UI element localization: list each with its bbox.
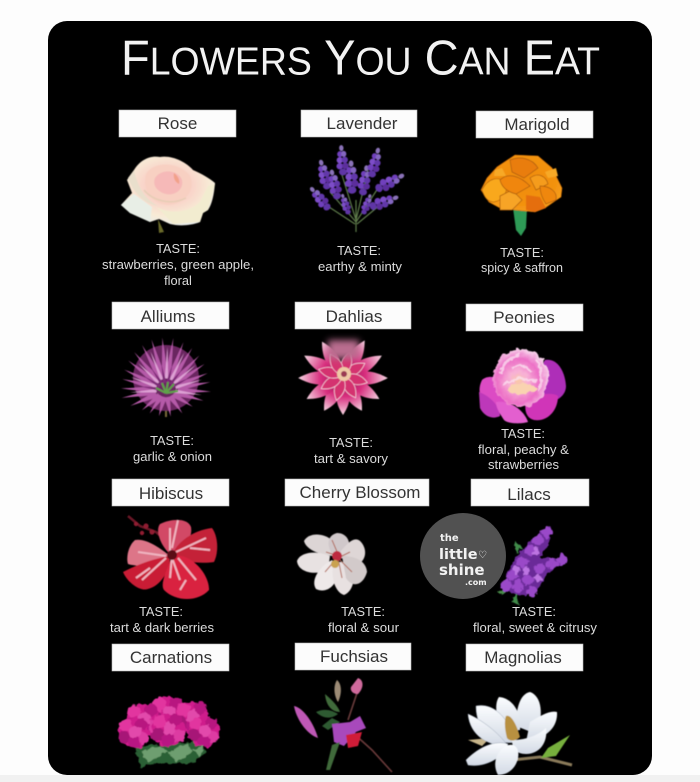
item: Lilacs — [471, 479, 598, 635]
label: Lavender: Lavender — [327, 114, 398, 133]
taste text: Rose — [102, 241, 254, 288]
item: Hibiscus — [110, 479, 229, 635]
icon: carnation flowers — [118, 697, 219, 768]
taste text: Peonies — [478, 426, 569, 472]
item: Peonies — [466, 304, 583, 472]
taste text: Dahlias: tart & savory — [314, 451, 389, 466]
item: Lavender — [301, 110, 417, 274]
item: Carnations — [112, 644, 229, 768]
watermark: the little shine: shine — [439, 561, 485, 579]
label: Lilacs: Lilacs — [507, 485, 551, 504]
label: Alliums: Alliums — [141, 307, 195, 326]
taste text: Lilacs: floral, sweet & citrusy — [473, 620, 598, 635]
watermark: the little shine: ♡ — [478, 550, 487, 561]
taste text: Alliums — [133, 433, 212, 464]
item: Marigold — [476, 111, 593, 275]
taste text: Alliums: garlic & onion — [133, 449, 212, 464]
taste text: Rose: strawberries, green apple, — [102, 257, 254, 272]
icon: marigold flower — [481, 155, 562, 236]
taste text: Rose: TASTE: — [156, 241, 200, 256]
taste text: Peonies: strawberries — [488, 457, 559, 472]
taste text: Cherry Blossom — [328, 604, 400, 635]
watermark: the little shine — [420, 513, 506, 599]
label: Cherry Blossom — [285, 479, 429, 506]
taste text: Peonies: TASTE: — [501, 426, 545, 441]
peony frilly centre — [493, 349, 549, 407]
label: Dahlias: Dahlias — [326, 307, 382, 326]
label: Rose: Rose — [158, 114, 197, 133]
watermark: the little shine: the — [440, 533, 459, 544]
icon: fuchsia flower — [294, 678, 392, 772]
label: Fuchsias: Fuchsias — [320, 647, 388, 666]
label: Cherry Blossom: Cherry Blossom — [300, 483, 420, 502]
label: Marigold: Marigold — [504, 115, 570, 134]
item: Alliums — [112, 302, 229, 464]
taste text: Rose: floral — [164, 273, 192, 288]
label: Carnations: Carnations — [130, 648, 212, 667]
icon: hibiscus flower — [123, 516, 217, 599]
label: Alliums — [112, 302, 229, 329]
taste text: Lavender: earthy & minty — [318, 259, 403, 274]
taste text: Dahlias — [314, 435, 389, 466]
label: Marigold — [476, 111, 593, 138]
item: Rose — [102, 110, 254, 288]
taste text: Lavender: TASTE: — [337, 243, 381, 258]
label: Lavender — [301, 110, 417, 137]
label: Dahlias — [295, 302, 411, 329]
icon: lavender bunch — [306, 145, 407, 232]
icon: cherry blossom flower — [297, 533, 367, 595]
taste text: Cherry Blossom: TASTE: — [341, 604, 385, 619]
label: Lilacs — [471, 479, 589, 506]
blurred patch on dahlia — [328, 340, 359, 359]
taste text: Hibiscus — [110, 604, 214, 635]
bottom strip: mask overflow — [0, 775, 700, 782]
taste text: Lilacs — [473, 604, 598, 635]
taste text: Lavender — [318, 243, 403, 274]
icon: lilac flower — [497, 526, 568, 604]
taste text: Peonies: floral, peachy & — [478, 442, 569, 457]
item: Dahlias — [295, 302, 411, 466]
taste text: Marigold: TASTE: — [500, 245, 544, 260]
label: Peonies — [466, 304, 583, 331]
taste text: Marigold: spicy & saffron — [481, 260, 563, 275]
title: FLOWERS YOU CAN EAT — [121, 32, 600, 86]
item: Magnolias — [466, 644, 583, 775]
taste text: Alliums: TASTE: — [150, 433, 194, 448]
taste text: Marigold — [481, 245, 563, 275]
taste text: Cherry Blossom: floral & sour — [328, 620, 400, 635]
item: Cherry Blossom — [285, 479, 429, 635]
taste text: Hibiscus: TASTE: — [139, 604, 183, 619]
label: Rose — [119, 110, 236, 137]
taste text: Lilacs: TASTE: — [512, 604, 556, 619]
icon: magnolia flower — [466, 692, 572, 775]
label: Hibiscus: Hibiscus — [139, 484, 203, 503]
icon: dahlia flower — [298, 337, 388, 415]
watermark: the little shine: little — [439, 547, 478, 563]
watermark: the little shine: .com — [465, 578, 487, 587]
item: Fuchsias — [294, 643, 411, 772]
label: Peonies: Peonies — [493, 308, 555, 327]
label: Magnolias: Magnolias — [484, 648, 562, 667]
taste text: Dahlias: TASTE: — [329, 435, 373, 450]
icon: allium flower — [121, 337, 211, 417]
taste text: Hibiscus: tart & dark berries — [110, 620, 214, 635]
icon: peony flower — [479, 360, 566, 423]
icon: rose flower — [121, 157, 215, 233]
label: Hibiscus — [112, 479, 229, 506]
